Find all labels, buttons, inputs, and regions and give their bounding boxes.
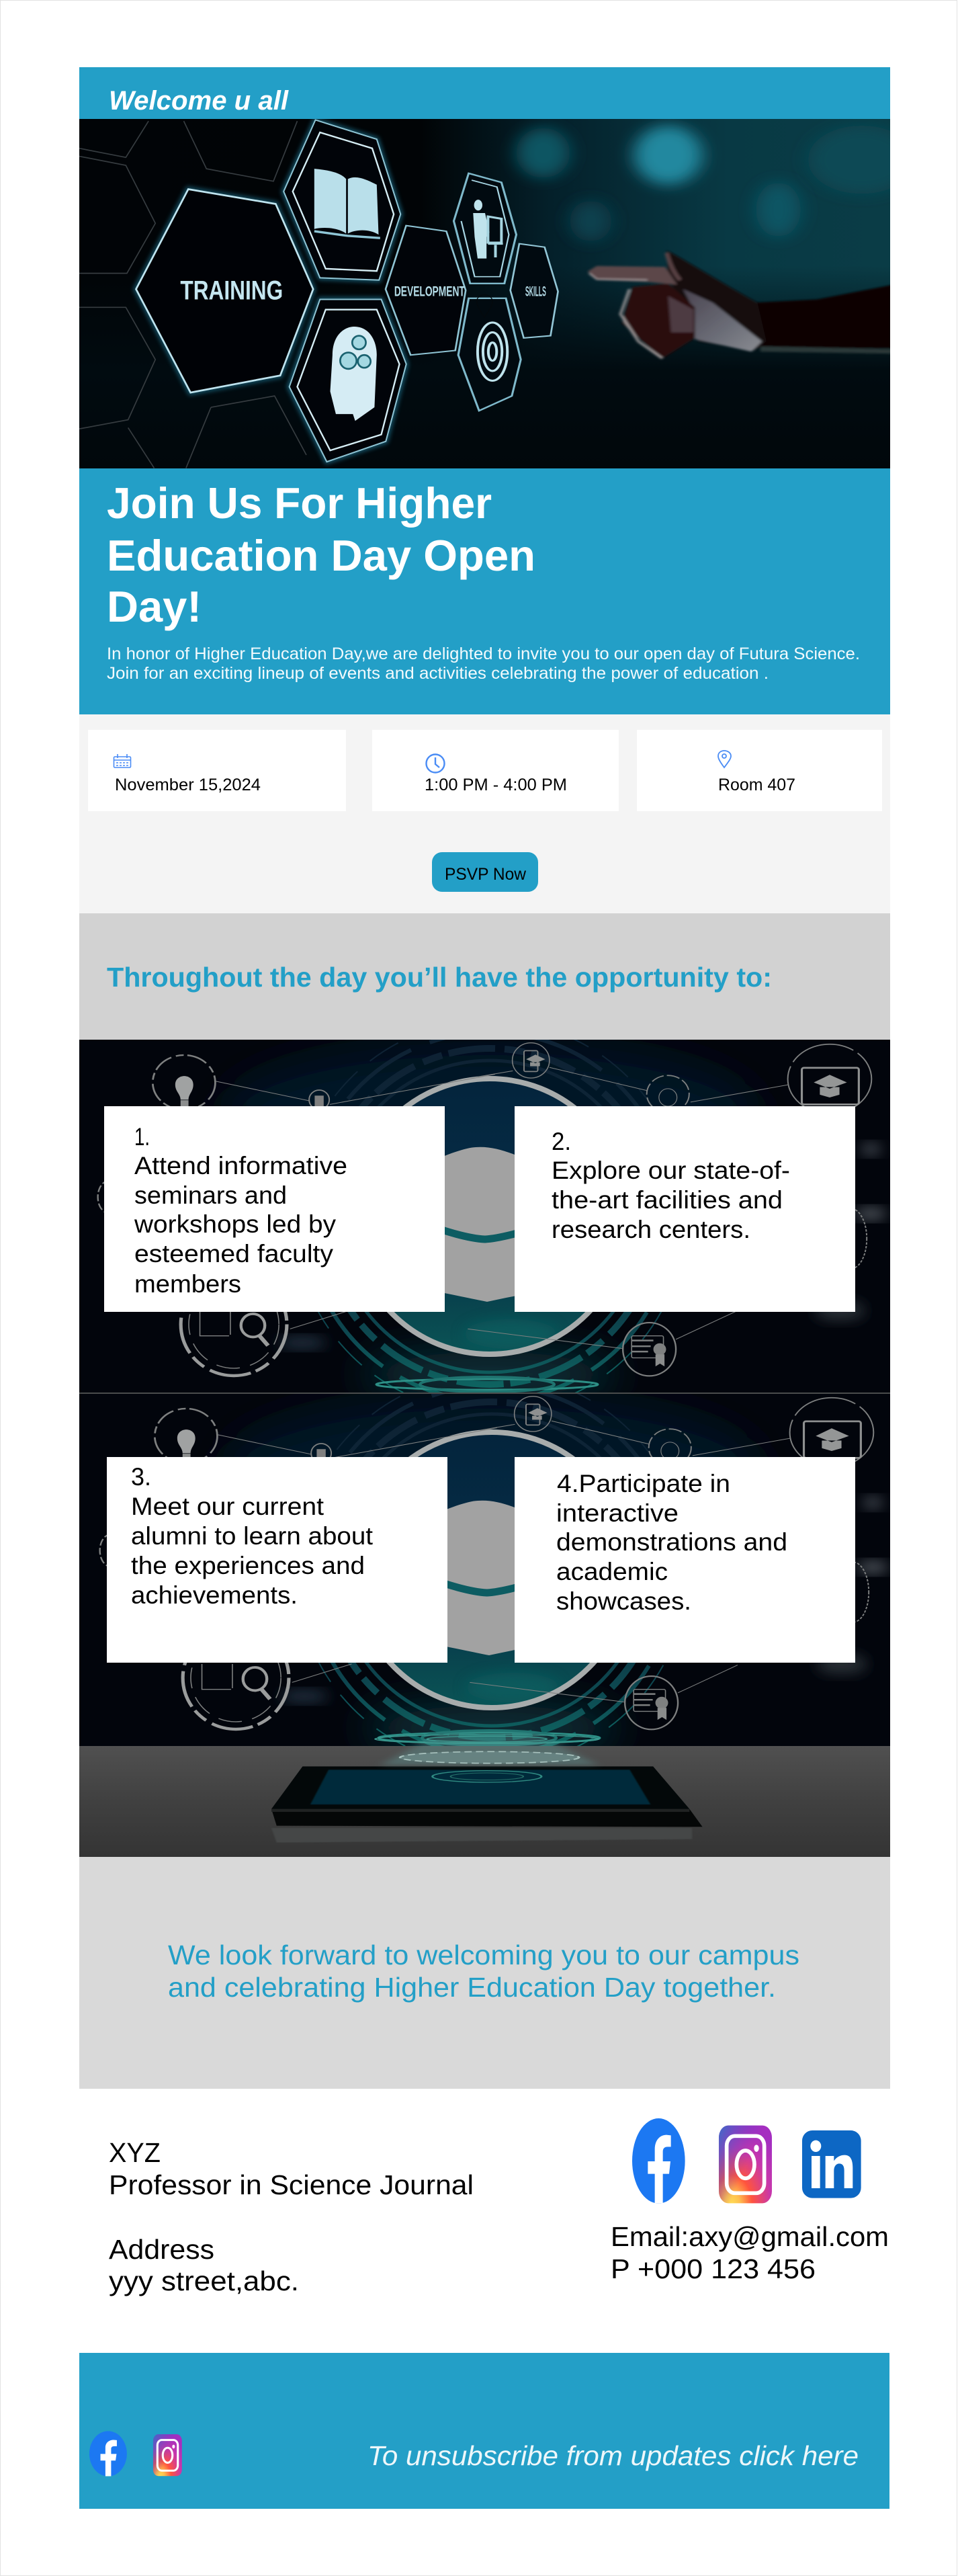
icon: clock <box>426 754 445 773</box>
card 2: facilities: 2. <box>552 1128 571 1155</box>
button: RSVP: PSVP Now <box>445 865 527 884</box>
card: time: 1:00 PM - 4:00 PM <box>425 776 567 794</box>
invitation paragraph: Join for an exciting lineup of events and activities celebrating the power of education . <box>107 664 769 683</box>
hero image: training hexagons and pointing hand: DEVELOPMENT <box>394 284 465 300</box>
main headline: Day! <box>107 582 202 631</box>
card 1: seminars: esteemed faculty <box>134 1240 334 1268</box>
card 3: alumni: 3. <box>131 1463 151 1491</box>
card 2: facilities: the-art facilities and <box>552 1186 783 1214</box>
presenter hex <box>453 173 517 284</box>
card 1: seminars: 1. <box>134 1123 150 1151</box>
icon: calendar <box>114 754 130 767</box>
development hex <box>386 226 466 355</box>
contact details: email and phone: Email:axy@gmail.com <box>611 2221 889 2252</box>
unsubscribe text: To unsubscribe from updates click here <box>367 2440 859 2471</box>
icon: facebook <box>632 2118 685 2204</box>
main headline <box>107 479 535 631</box>
contact details: name and address: yyy street,abc. <box>109 2266 299 2296</box>
card 3: alumni: achievements. <box>131 1581 298 1609</box>
icon: small map pin on hero <box>477 294 492 299</box>
card: room: Room 407 <box>718 776 795 794</box>
contact details: name and address <box>109 2137 474 2296</box>
dim background hex lines <box>79 121 306 468</box>
background image: digital education, first copy <box>79 1040 890 1393</box>
panel: closing message: and celebrating Higher Education Day together. <box>168 1972 776 2003</box>
main headline: Education Day Open <box>107 531 535 580</box>
contact details: email and phone <box>611 2221 889 2284</box>
skills hex <box>511 244 558 338</box>
card 1: seminars: Attend informative <box>134 1152 347 1179</box>
panel: footer band <box>79 2353 889 2509</box>
welcome heading: Welcome u all <box>109 86 289 116</box>
contact details: name and address: Professor in Science Journal <box>109 2169 474 2200</box>
icon: map pin <box>718 751 731 767</box>
card 3: alumni: the experiences and <box>131 1552 365 1579</box>
book hex <box>284 120 400 280</box>
panel: event details <box>79 714 890 913</box>
card 2: facilities: Explore our state-of- <box>552 1157 790 1184</box>
card 1: seminars <box>104 1106 445 1312</box>
card 4: demonstrations: showcases. <box>556 1587 691 1615</box>
card 1: seminars: workshops led by <box>134 1210 337 1238</box>
card 1: seminars: seminars and <box>134 1181 287 1209</box>
card 3: alumni <box>107 1457 447 1663</box>
training hex <box>136 190 313 392</box>
panel: closing message <box>79 1857 890 2089</box>
icon: instagram <box>719 2126 772 2203</box>
card 4: demonstrations: demonstrations and <box>556 1528 787 1556</box>
card 3: alumni: alumni to learn about <box>131 1522 374 1550</box>
target hex <box>458 298 521 411</box>
head hex <box>290 299 406 462</box>
card 4: demonstrations: 4.Participate in <box>557 1470 730 1497</box>
invitation paragraph <box>107 645 860 683</box>
card: date: November 15,2024 <box>115 776 261 794</box>
panel: invitation <box>79 468 890 714</box>
card 4: demonstrations: interactive <box>556 1499 679 1527</box>
panel: section heading <box>79 913 890 1040</box>
contact details: email and phone: P +000 123 456 <box>611 2253 816 2284</box>
card: time <box>372 730 619 811</box>
contact details: name and address: XYZ <box>109 2137 161 2168</box>
hero image: training hexagons and pointing hand: TRAINING <box>180 276 283 305</box>
icon: small facebook <box>89 2431 127 2477</box>
card 4: demonstrations <box>515 1457 855 1663</box>
panel: welcome header <box>79 67 890 119</box>
card 1: seminars: members <box>134 1270 241 1298</box>
card: room <box>637 730 882 811</box>
pointing hand <box>588 251 894 358</box>
card 2: facilities: research centers. <box>552 1216 750 1243</box>
panel: closing message: We look forward to welcoming you to our campus <box>168 1940 799 1970</box>
hero image: training hexagons and pointing hand <box>79 119 915 468</box>
background image: digital education with tablet, second copy <box>79 1374 892 1858</box>
main headline: Join Us For Higher <box>107 479 492 528</box>
invitation paragraph: In honor of Higher Education Day,we are delighted to invite you to our open day of Futura Science. <box>107 645 860 663</box>
contact details: name and address: Address <box>109 2234 214 2265</box>
card 4: demonstrations: academic <box>556 1558 668 1585</box>
card 2: facilities <box>515 1106 855 1312</box>
icon: linkedin <box>802 2130 861 2198</box>
panel: section heading: Throughout the day you’ll have the opportunity to: <box>107 962 772 993</box>
card: date <box>88 730 346 811</box>
card 3: alumni: Meet our current <box>131 1493 324 1520</box>
hero image: training hexagons and pointing hand: SKILLS <box>525 284 546 300</box>
button: RSVP <box>432 852 538 892</box>
icon: small instagram <box>153 2434 182 2476</box>
